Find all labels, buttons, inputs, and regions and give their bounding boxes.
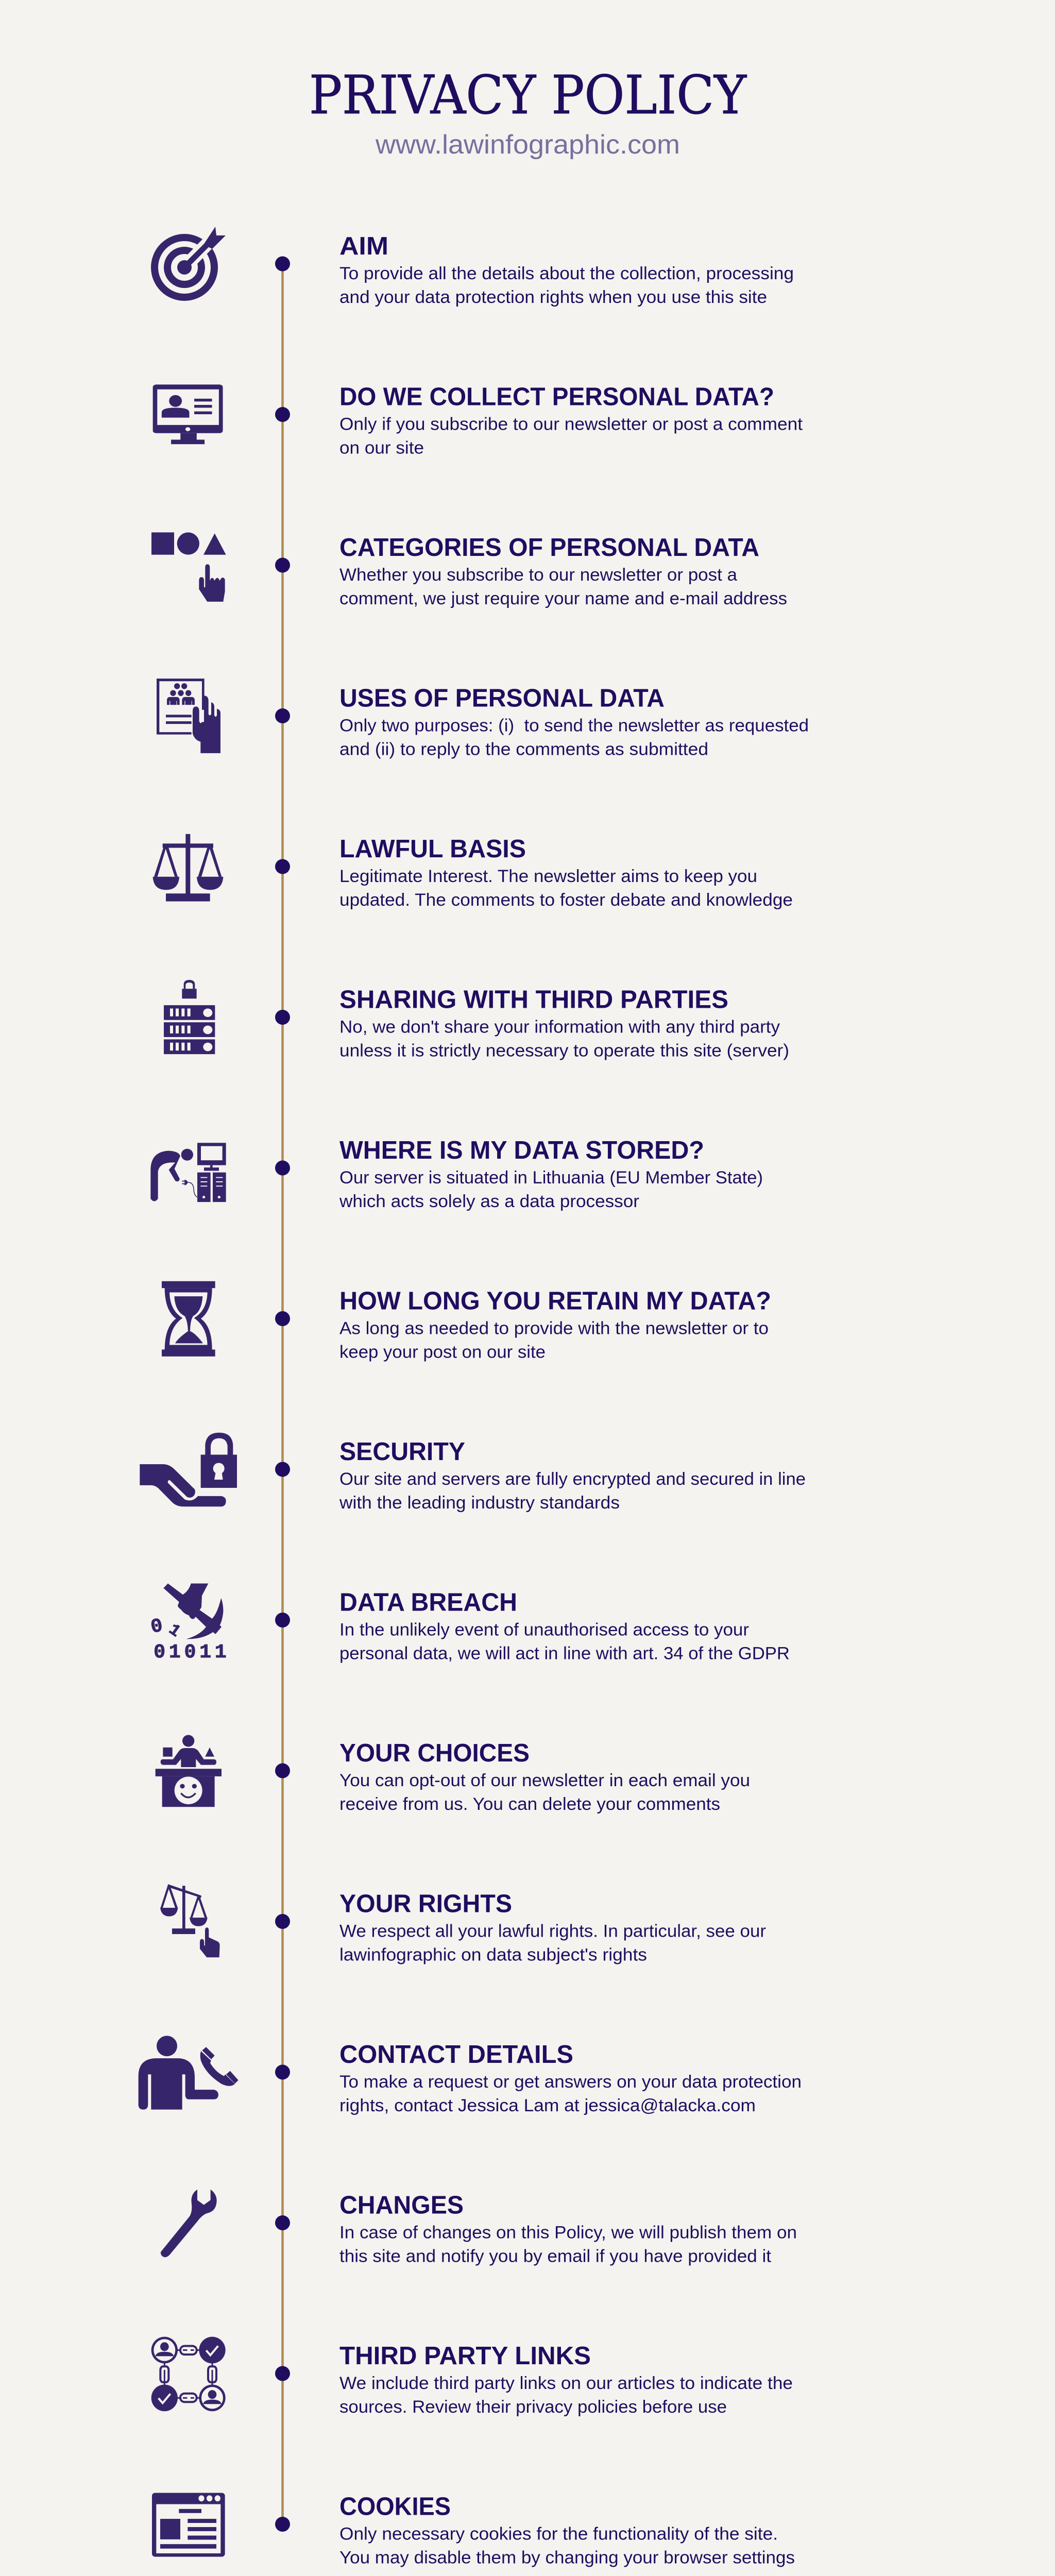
icon: person and desktop computers — [150, 1143, 226, 1202]
body text: Only two purposes: (i) to send the newsletter as requested — [339, 716, 809, 736]
timeline dot — [275, 2517, 290, 2532]
body text — [339, 264, 794, 307]
body text: which acts solely as a data processor — [339, 1192, 639, 1211]
heading: CONTACT DETAILS — [339, 2041, 573, 2069]
icon: pickaxe breaking binary data: 1 — [165, 1620, 184, 1641]
body text: on our site — [339, 438, 424, 457]
timeline dot — [275, 1311, 290, 1326]
body text: updated. The comments to foster debate and knowledge — [339, 890, 793, 910]
body text: receive from us. You can delete your comments — [339, 1794, 720, 1814]
body text: with the leading industry standards — [339, 1493, 620, 1513]
heading: HOW LONG YOU RETAIN MY DATA? — [339, 1287, 771, 1315]
section: third party links — [151, 2337, 793, 2417]
icon: tilted scales and pointing hand — [160, 1884, 220, 1957]
timeline dot — [275, 1010, 290, 1025]
body text: lawinfographic on data subject's rights — [339, 1945, 647, 1965]
icon: pickaxe breaking binary data — [149, 1584, 227, 1664]
heading: YOUR CHOICES — [339, 1739, 530, 1767]
icon: chained people and checkmarks — [151, 2337, 226, 2411]
heading: CATEGORIES OF PERSONAL DATA — [339, 534, 759, 562]
body text: Our server is situated in Lithuania (EU Member State) — [339, 1168, 763, 1188]
body text: Our site and servers are fully encrypted and secured in line — [339, 1469, 806, 1489]
section: your choices — [156, 1735, 750, 1814]
section: contact details — [139, 2036, 802, 2115]
body text — [339, 2072, 802, 2115]
timeline dot — [275, 2366, 290, 2381]
body text: You can opt-out of our newsletter in each email you — [339, 1771, 750, 1790]
heading: THIRD PARTY LINKS — [339, 2342, 591, 2370]
body text — [339, 1469, 806, 1513]
title: PRIVACY POLICY — [309, 64, 747, 126]
body text — [339, 414, 803, 457]
heading: COOKIES — [339, 2493, 451, 2520]
section: how long you retain my data — [162, 1281, 771, 1362]
heading: USES OF PERSONAL DATA — [339, 684, 665, 712]
timeline dot — [275, 2215, 290, 2230]
icon: person with telephone — [139, 2036, 239, 2110]
timeline dot — [275, 1613, 290, 1628]
heading: SECURITY — [339, 1438, 465, 1466]
icon: pickaxe breaking binary data: 0 — [184, 1641, 196, 1664]
body text: Legitimate Interest. The newsletter aims to keep you — [339, 867, 757, 886]
body text: Whether you subscribe to our newsletter or post a — [339, 565, 738, 585]
timeline dot — [275, 257, 290, 271]
icon: locked server rack — [164, 980, 215, 1054]
heading: AIM — [339, 232, 388, 260]
icon: hand holding padlock — [140, 1433, 237, 1506]
timeline line — [281, 264, 284, 2524]
icon: pickaxe breaking binary data: 1 — [199, 1641, 211, 1664]
body text: unless it is strictly necessary to operate this site (server) — [339, 1041, 789, 1060]
heading: LAWFUL BASIS — [339, 835, 526, 863]
body text: In case of changes on this Policy, we will publish them on — [339, 2223, 797, 2242]
timeline dot — [275, 1763, 290, 1778]
body text: To provide all the details about the collection, processing — [339, 264, 794, 283]
heading: YOUR RIGHTS — [339, 1890, 512, 1918]
section: categories of personal data — [151, 532, 787, 608]
icon: monitor with profile — [153, 384, 223, 444]
timeline dot — [275, 407, 290, 422]
section: where is my data stored — [150, 1137, 763, 1211]
subtitle url: www.lawinfographic.com — [375, 130, 680, 160]
section: data breach — [149, 1584, 790, 1664]
body text: We include third party links on our articles to indicate the — [339, 2374, 793, 2393]
icon: shapes and pointing hand — [151, 532, 226, 602]
timeline dot — [275, 557, 290, 573]
body text: and (ii) to reply to the comments as submitted — [339, 740, 708, 759]
timeline dot — [275, 1462, 290, 1477]
heading: SHARING WITH THIRD PARTIES — [339, 986, 728, 1014]
icon: wrench — [161, 2190, 217, 2257]
body text: personal data, we will act in line with art. 34 of the GDPR — [339, 1643, 790, 1663]
icon: pickaxe breaking binary data: 1 — [169, 1641, 181, 1664]
body text: sources. Review their privacy policies before use — [339, 2397, 727, 2417]
section: cookies — [152, 2493, 795, 2568]
icon: balance scales — [153, 834, 223, 902]
timeline dot — [275, 1914, 290, 1929]
body text: and your data protection rights when you use this site — [339, 287, 767, 307]
icon: hand holding card with people — [157, 679, 222, 756]
body text: You may disable them by changing your browser settings — [339, 2548, 795, 2568]
body text — [339, 1922, 766, 1965]
timeline dot — [275, 859, 290, 874]
icon: target with arrow — [155, 227, 226, 297]
body text: As long as needed to provide with the newsletter or to — [339, 1319, 769, 1338]
body text — [339, 2524, 795, 2568]
body text — [339, 867, 793, 910]
section: uses of personal data — [157, 679, 809, 759]
body text: this site and notify you by email if you have provided it — [339, 2246, 771, 2266]
timeline dot — [275, 708, 290, 723]
heading: CHANGES — [339, 2192, 464, 2219]
body text — [339, 1620, 790, 1663]
body text: In the unlikely event of unauthorised access to your — [339, 1620, 749, 1639]
body text — [339, 1319, 769, 1362]
body text — [339, 2374, 793, 2417]
body text: comment, we just require your name and e-mail address — [339, 589, 787, 608]
section: sharing with third parties — [164, 980, 789, 1060]
body text — [339, 1017, 789, 1060]
heading: DO WE COLLECT PERSONAL DATA? — [339, 383, 774, 411]
body text — [339, 565, 787, 608]
icon: pickaxe breaking binary data: 1 — [215, 1641, 227, 1664]
section: security — [140, 1433, 806, 1513]
body text: Only if you subscribe to our newsletter or post a comment — [339, 414, 803, 434]
section: do we collect personal data — [153, 383, 803, 457]
icon: browser window — [152, 2493, 225, 2557]
section: changes — [161, 2190, 797, 2266]
body text — [339, 1771, 750, 1814]
section: lawful basis — [153, 834, 793, 910]
section: your rights — [160, 1884, 766, 1965]
heading: WHERE IS MY DATA STORED? — [339, 1137, 704, 1164]
timeline dot — [275, 2065, 290, 2079]
icon: hourglass — [162, 1281, 215, 1357]
body text: To make a request or get answers on your data protection — [339, 2072, 802, 2092]
timeline dot — [275, 1160, 290, 1176]
icon: pickaxe breaking binary data: 0 — [149, 1615, 164, 1639]
body text: rights, contact Jessica Lam at jessica@talacka.com — [339, 2096, 756, 2115]
section: aim — [155, 227, 794, 307]
body text: Only necessary cookies for the functionality of the site. — [339, 2524, 778, 2544]
heading: DATA BREACH — [339, 1589, 517, 1617]
body text: keep your post on our site — [339, 1343, 546, 1362]
body text: We respect all your lawful rights. In particular, see our — [339, 1922, 766, 1941]
body text — [339, 2223, 797, 2266]
icon: pickaxe breaking binary data: 0 — [154, 1641, 165, 1664]
body text — [339, 716, 809, 759]
icon: person at desk with smiley — [156, 1735, 222, 1807]
body text: No, we don't share your information with any third party — [339, 1017, 780, 1037]
body text — [339, 1168, 763, 1211]
